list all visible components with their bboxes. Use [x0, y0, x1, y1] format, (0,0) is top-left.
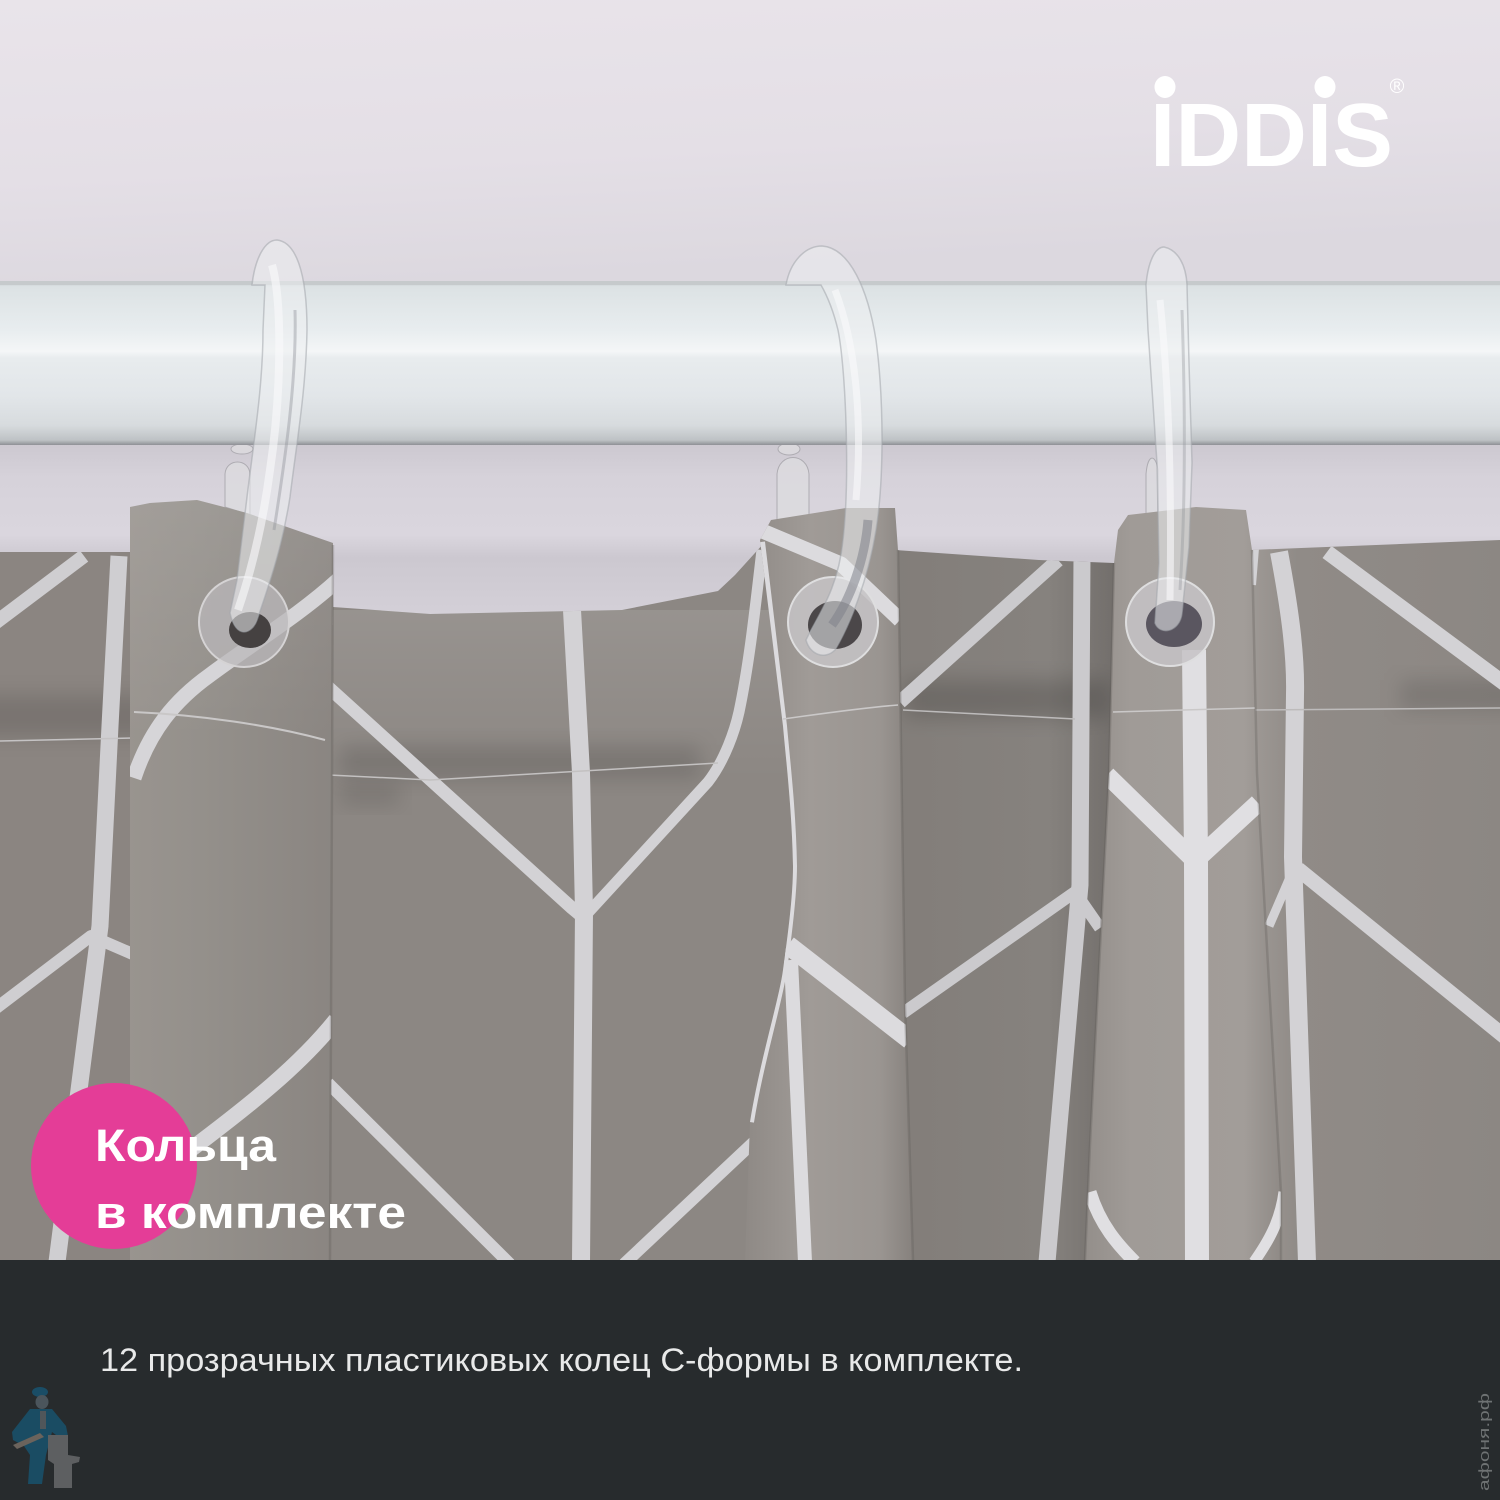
eyelet two	[788, 577, 878, 667]
curtain panel: fold two	[748, 508, 906, 1260]
watermark: афоня.рф	[1476, 1393, 1493, 1491]
curtain panel: centre with chevron	[328, 540, 803, 1264]
ring one	[199, 240, 307, 667]
wall background	[0, 0, 1500, 285]
heading: rings included: Кольца	[95, 1120, 277, 1171]
curtain panel: fold three	[1080, 505, 1285, 1263]
eyelet one	[199, 577, 289, 667]
curtain rod	[0, 281, 1500, 445]
fold shadow lines	[330, 545, 1281, 1260]
pink accent circle	[31, 1083, 197, 1249]
dark footer panel	[0, 1260, 1500, 1500]
curtain panel: far left	[0, 552, 130, 1260]
logo: IDDIS: ®	[1390, 76, 1405, 98]
wall below the rod	[0, 440, 1500, 630]
heading: rings included: в комплекте	[95, 1187, 406, 1238]
description text: 12 прозрачных пластиковых колец С-формы в комплекте.	[100, 1342, 1023, 1378]
heading: rings included	[95, 1120, 406, 1238]
ring three	[1126, 247, 1214, 666]
ring pegs behind curtain	[225, 443, 1158, 520]
eyelet three	[1126, 578, 1214, 666]
curtain panel: fold one	[128, 500, 340, 1262]
curtain base	[0, 625, 1500, 1262]
logo: IDDIS: IDDIS	[1150, 86, 1393, 186]
shower curtain	[0, 500, 1500, 1265]
icon: plumber with toilet	[12, 1387, 80, 1488]
curtain panel: centre right	[898, 550, 1114, 1260]
curtain panel: right	[1245, 535, 1500, 1263]
ring two	[786, 246, 882, 667]
